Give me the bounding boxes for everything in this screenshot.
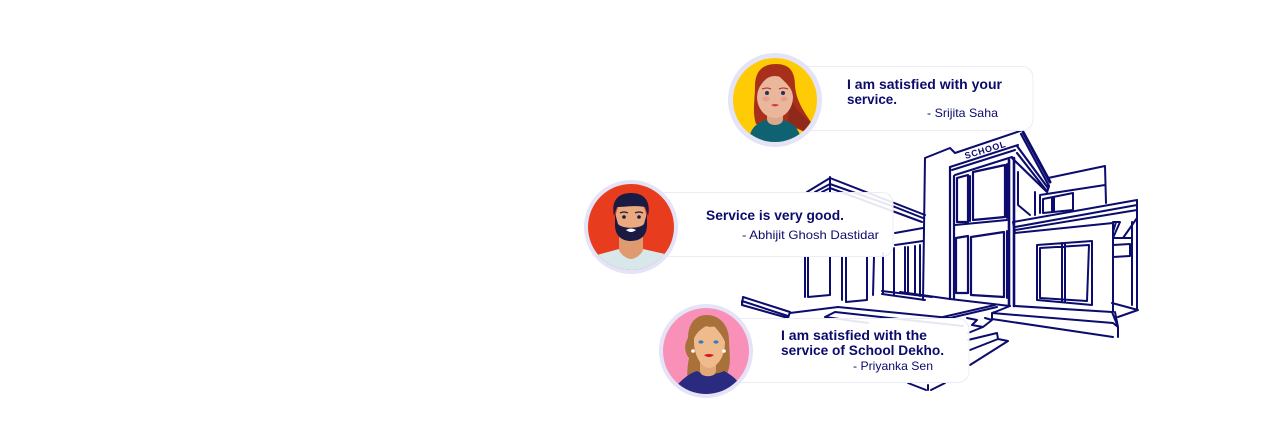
card 1 quote: I am satisfied with your bbox=[847, 76, 1003, 92]
card 1 quote bbox=[847, 76, 1003, 107]
building: central tower bbox=[900, 131, 1050, 306]
card 1 quote: service. bbox=[847, 91, 897, 107]
infographic canvas bbox=[584, 53, 1139, 398]
building: left wing bbox=[742, 177, 997, 326]
card 3 background bbox=[726, 318, 969, 382]
school building line drawing bbox=[742, 131, 1138, 390]
building sign: SCHOOL: SCHOOL bbox=[963, 139, 1007, 161]
avatar: woman with blonde hair bbox=[659, 304, 753, 398]
card 1 background bbox=[790, 66, 1033, 130]
card 3 quote bbox=[781, 327, 944, 358]
building: right wing bbox=[992, 166, 1138, 337]
card 2 author: - Abhijit Ghosh Dastidar bbox=[742, 228, 879, 242]
avatar: bearded man bbox=[584, 180, 678, 274]
card 2 background bbox=[650, 192, 893, 256]
building: front steps bbox=[908, 305, 1008, 390]
avatar: woman with red hair bbox=[728, 53, 822, 147]
testimonial card 1 bbox=[790, 66, 1033, 130]
testimonial card 2 bbox=[650, 192, 893, 256]
testimonial card 3 bbox=[726, 318, 969, 382]
card 1 author: - Srijita Saha bbox=[927, 106, 998, 120]
card 2 quote: Service is very good. bbox=[706, 207, 844, 223]
card 3 quote: I am satisfied with the bbox=[781, 327, 927, 343]
card 3 quote: service of School Dekho. bbox=[781, 342, 944, 358]
card 3 author: - Priyanka Sen bbox=[853, 359, 933, 373]
